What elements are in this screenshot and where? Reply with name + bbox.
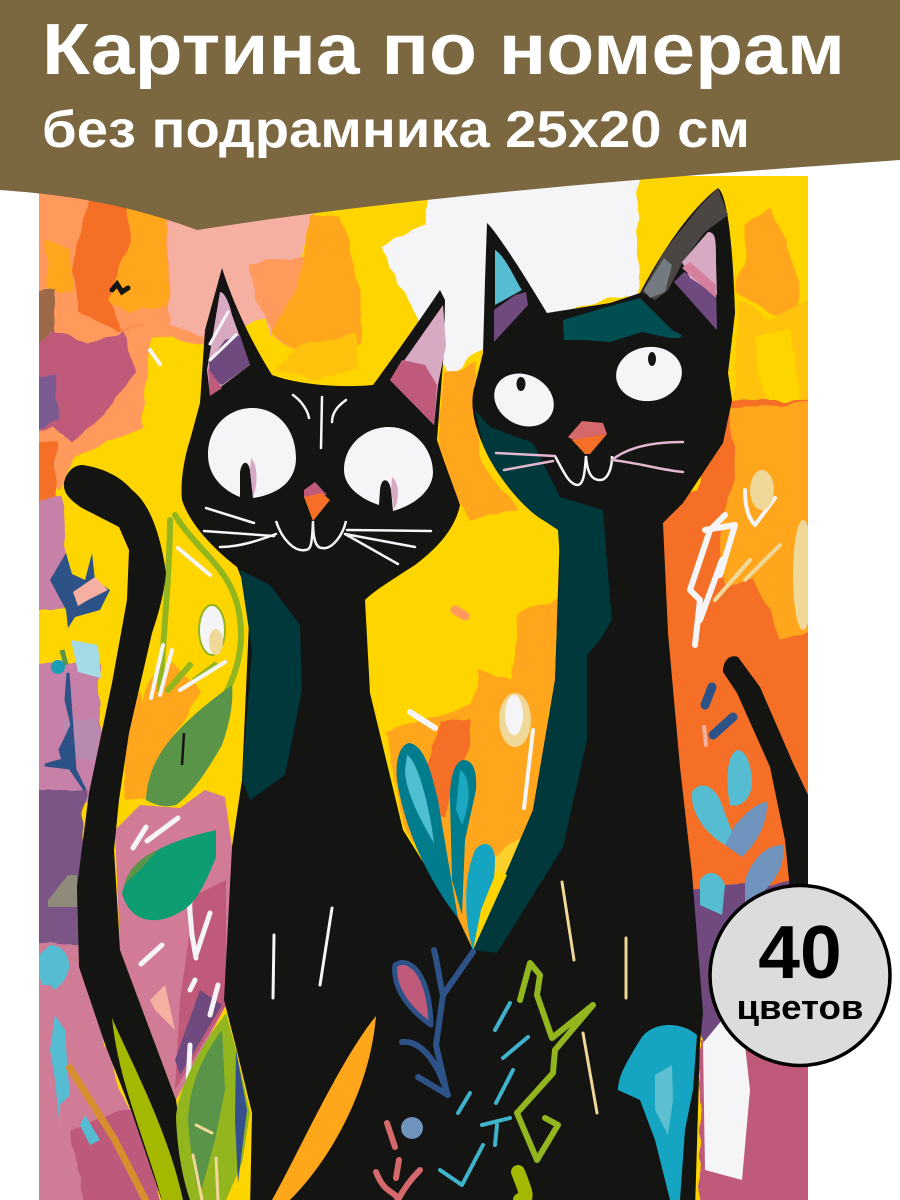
cat tail left [64,465,192,1200]
badge: 40 colours [710,886,890,1066]
title: Картина по номерам [42,10,845,90]
ear grey shading [642,188,728,300]
flower: teal petals in the centre [397,743,507,950]
left ear inner [207,292,250,395]
whiskers [496,442,683,472]
leaf: green upper [146,685,232,806]
left ear inner [495,250,522,305]
badge: 40 colours: 40 [758,910,842,994]
right ear inner [674,272,717,330]
body and head [472,188,735,1200]
neck teal shade [473,410,612,953]
leaves: blue right [692,687,783,915]
pupils [516,377,526,391]
left teal blob and brush strokes [39,875,148,1200]
neck teal shade [240,570,302,800]
cat tail right [723,656,808,890]
whiskers [204,508,431,564]
pink panel with green leaves [115,790,232,1100]
small black bird mark [112,284,128,292]
eyes [494,374,554,426]
chest lines [273,908,332,998]
plant: orange leaf [272,1016,376,1200]
right ear inner [390,305,446,425]
subtitle: без подрамника 25х20 см [42,101,750,159]
black cat right [472,188,735,1200]
plant: large teal leaf [618,1025,697,1200]
painting: two black cats [20,160,820,1200]
badge: 40 colours: цветов [736,989,864,1027]
white patch bottom right [703,1020,750,1180]
nose [568,421,607,441]
left side flower [45,553,110,790]
background strokes and accents [150,350,813,808]
plant: bottom left leaves [112,1013,250,1200]
eyes [208,408,296,498]
cream lines on the body [562,882,626,1113]
top banner [0,0,900,230]
forehead lines [293,395,346,448]
plant: small sprigs at the bottom [376,950,593,1200]
ear white lines [210,312,236,360]
black cat left [182,268,480,1200]
painted background [20,160,820,1200]
mouth [555,456,612,485]
leaf: emerald [122,830,216,920]
body and head [182,268,480,1200]
eye shadows [250,458,257,497]
nose [304,482,327,498]
forehead teal patch [563,298,682,342]
mouth [276,521,346,550]
